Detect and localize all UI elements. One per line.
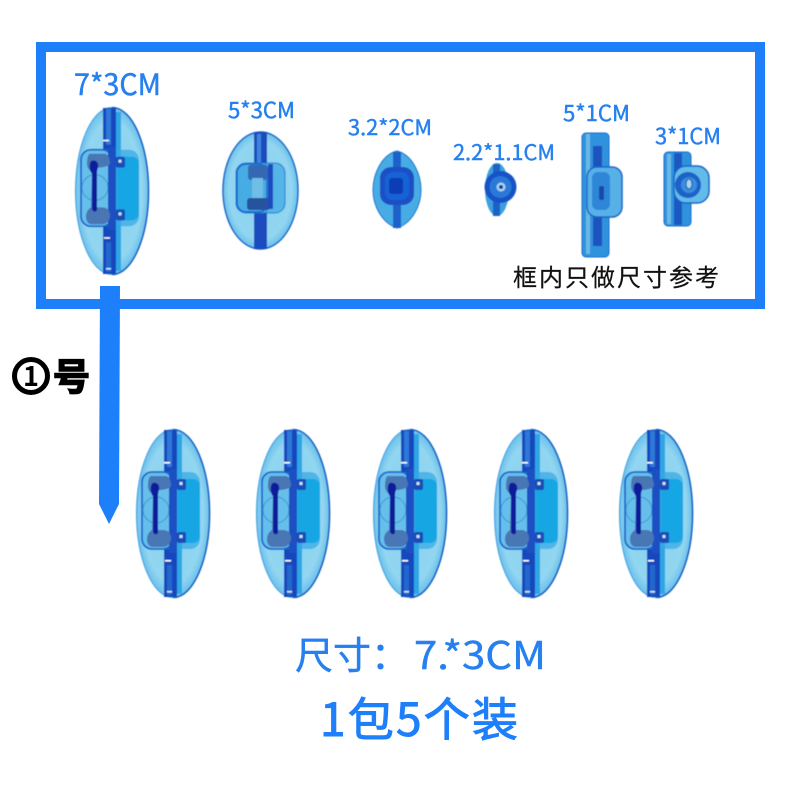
- row of five tabs: [136, 430, 692, 598]
- arrow: [99, 286, 120, 524]
- size caption: 尺寸：: [295, 625, 409, 680]
- label: 3.2*2CM: 3.2*2CM: [348, 112, 432, 142]
- label: 2.2*1.1CM: 2.2*1.1CM: [453, 137, 555, 167]
- label: 7*3CM: 7*3CM: [74, 62, 161, 104]
- label: 5*3CM: 5*3CM: [228, 93, 295, 125]
- pack quantity caption: 1包5个装: [320, 684, 518, 750]
- icon: tab 5x1: [582, 133, 622, 257]
- size caption: 7.*3CM: [414, 625, 546, 680]
- label: number 1: [14, 347, 90, 401]
- tab 3: [374, 430, 446, 598]
- icon: tab 7x3: [76, 107, 148, 275]
- icon: tab 3x1: [664, 152, 709, 226]
- tab 2: [256, 430, 330, 598]
- tab 1: [136, 430, 210, 598]
- label: number 1: 1: [23, 355, 39, 394]
- tab 5: [620, 430, 692, 598]
- label: 5*1CM: 5*1CM: [563, 96, 630, 128]
- label: number 1: 号: [53, 347, 90, 401]
- icon: tab 5x3: [223, 132, 298, 249]
- tab 4: [494, 430, 568, 598]
- icon: tab 3.2x2: [373, 151, 421, 228]
- size reference frame: [41, 47, 760, 304]
- label: 3*1CM: 3*1CM: [655, 119, 721, 151]
- icon: tab 2.2x1.1: [484, 163, 516, 216]
- note: for size reference only: 框内只做尺寸参考: [513, 258, 719, 293]
